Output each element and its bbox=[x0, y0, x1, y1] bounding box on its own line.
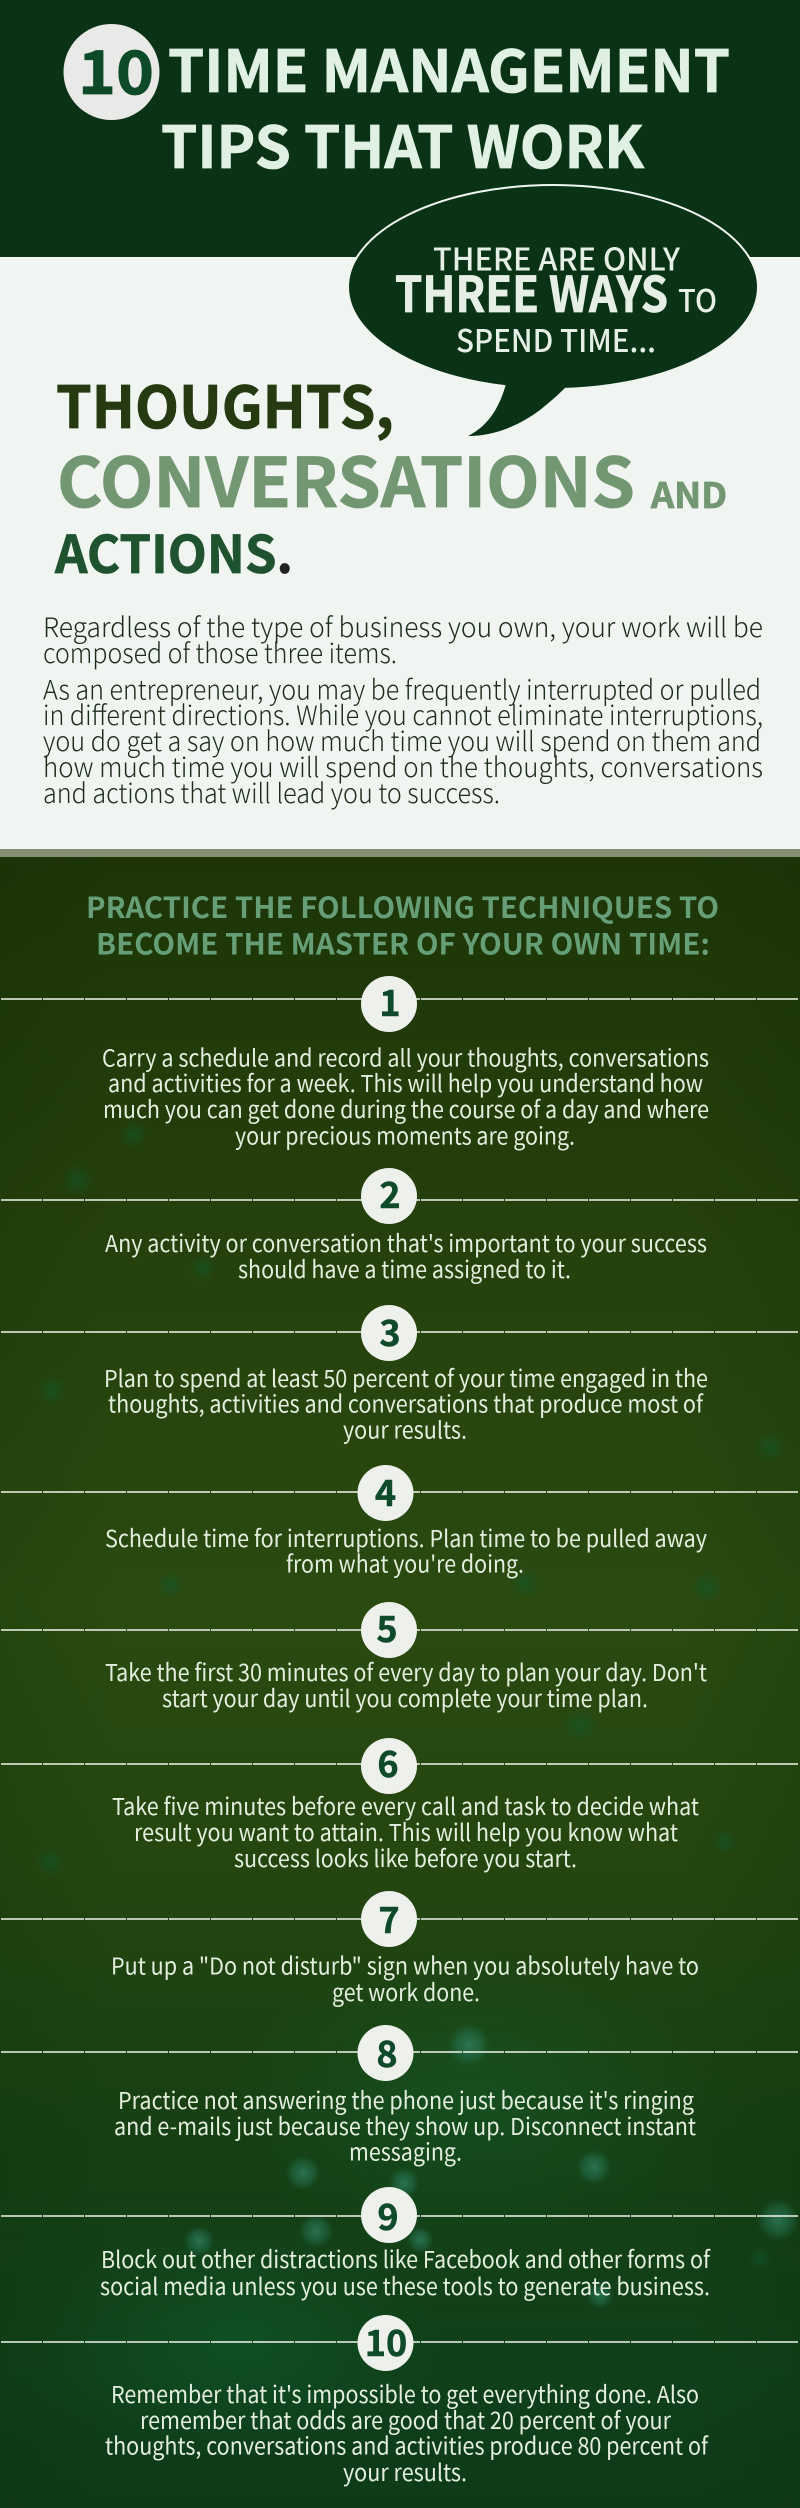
tip 8: messaging. bbox=[349, 2134, 462, 2168]
tip 6: success looks like before you start. bbox=[234, 1840, 577, 1874]
heading: practice the following techniques: BECOME THE MASTER OF YOUR OWN TIME: bbox=[96, 922, 710, 964]
tip 2: 2 bbox=[379, 1167, 401, 1219]
tip 3: Plan to spend at least 50 percent of your time engaged in the bbox=[104, 1360, 708, 1394]
text block: introduction bbox=[43, 606, 763, 811]
heading: thoughts, conversations and actions: AND bbox=[650, 468, 727, 519]
tip 6: 6 bbox=[377, 1736, 399, 1788]
panel: title header bbox=[0, 0, 800, 257]
tip 4: from what you're doing. bbox=[286, 1546, 524, 1580]
tip 10: Remember that it's impossible to get everything done. Also bbox=[111, 2376, 699, 2410]
tip 10: your results. bbox=[343, 2454, 467, 2488]
icon: number 10 badge bbox=[64, 24, 160, 120]
icon: number 10 badge: 10 bbox=[78, 25, 154, 112]
tip 7: Put up a "Do not disturb" sign when you absolutely have to bbox=[111, 1948, 699, 1982]
text block: introduction: you do get a say on how much time you will spend on them and bbox=[43, 720, 761, 759]
tip 10: thoughts, conversations and activities produce 80 percent of bbox=[105, 2428, 709, 2462]
panel: intro background bbox=[0, 0, 800, 850]
tip 5: Take the first 30 minutes of every day to plan your day. Don't bbox=[105, 1654, 707, 1688]
text block: introduction: Regardless of the type of business you own, your work will be bbox=[43, 606, 763, 645]
tip 10 bbox=[1, 2315, 799, 2488]
tip 9: social media unless you use these tools to generate business. bbox=[100, 2268, 710, 2302]
tip 3: thoughts, activities and conversations that produce most of bbox=[108, 1386, 704, 1420]
text block: introduction: composed of those three items. bbox=[43, 632, 397, 671]
tip 7: 7 bbox=[378, 1892, 400, 1944]
tip 1: Carry a schedule and record all your thoughts, conversations bbox=[102, 1040, 709, 1074]
title: TIME MANAGEMENT bbox=[168, 25, 730, 109]
text block: introduction: As an entrepreneur, you may be frequently interrupted or pulled bbox=[43, 668, 761, 708]
tip 9: Block out other distractions like Facebook and other forms of bbox=[101, 2241, 711, 2275]
tip 6: result you want to attain. This will help you know what bbox=[134, 1814, 678, 1848]
tip 8: Practice not answering the phone just because it's ringing bbox=[118, 2082, 694, 2116]
tip 7 bbox=[1, 1891, 799, 2008]
tip 5 bbox=[1, 1601, 799, 1714]
tip 8 bbox=[1, 2025, 799, 2168]
tip 9: 9 bbox=[377, 2189, 399, 2241]
tip 10: 10 bbox=[365, 2315, 407, 2367]
tip 8: 8 bbox=[376, 2026, 398, 2078]
tip 1: and activities for a week. This will help you understand how bbox=[108, 1065, 703, 1099]
callout: speech bubble: SPEND TIME... bbox=[456, 316, 656, 361]
tip 3: 3 bbox=[379, 1305, 401, 1357]
tip 4 bbox=[1, 1465, 799, 1580]
callout: speech bubble bbox=[348, 185, 758, 436]
callout: speech bubble: THERE ARE ONLY bbox=[433, 234, 681, 280]
heading: thoughts, conversations and actions bbox=[54, 361, 727, 588]
title: TIPS THAT WORK bbox=[161, 101, 645, 185]
tip 8: and e-mails just because they show up. Disconnect instant bbox=[114, 2108, 696, 2142]
tip 10: remember that odds are good that 20 percent of your bbox=[140, 2402, 672, 2436]
heading: thoughts, conversations and actions: THOUGHTS, bbox=[56, 361, 394, 445]
divider band bbox=[0, 849, 800, 857]
tip 6: Take five minutes before every call and task to decide what bbox=[112, 1788, 699, 1822]
callout: speech bubble: TO bbox=[678, 276, 717, 321]
tip 1: much you can get done during the course of a day and where bbox=[103, 1091, 709, 1125]
tip 7: get work done. bbox=[332, 1974, 480, 2008]
callout: speech bubble: THREE WAYS bbox=[395, 256, 668, 327]
heading: thoughts, conversations and actions: CONVERSATIONS bbox=[57, 428, 635, 527]
tip 5: start your day until you complete your time plan. bbox=[162, 1680, 648, 1714]
tip 4: Schedule time for interruptions. Plan time to be pulled away bbox=[105, 1520, 707, 1554]
tip 2 bbox=[1, 1167, 799, 1285]
panel: techniques background bbox=[0, 857, 800, 2508]
tip 1 bbox=[1, 975, 799, 1152]
text block: introduction: how much time you will spend on the thoughts, conversations bbox=[43, 746, 763, 785]
text block: introduction: in different directions. While you cannot eliminate interruptions, bbox=[43, 694, 763, 733]
tip 2: Any activity or conversation that's important to your success bbox=[105, 1225, 707, 1259]
tip 1: 1 bbox=[379, 975, 401, 1027]
tip 6 bbox=[1, 1736, 799, 1874]
heading: thoughts, conversations and actions: ACTIONS. bbox=[54, 513, 293, 588]
tip 2: should have a time assigned to it. bbox=[238, 1251, 571, 1285]
tip 5: 5 bbox=[376, 1601, 398, 1653]
tip 4: 4 bbox=[375, 1465, 396, 1517]
tip 9 bbox=[1, 2187, 799, 2302]
heading: practice the following techniques bbox=[86, 885, 719, 964]
text block: introduction: and actions that will lead you to success. bbox=[43, 772, 500, 811]
tip 1: your precious moments are going. bbox=[235, 1118, 575, 1152]
tip 3 bbox=[1, 1305, 799, 1446]
heading: practice the following techniques: PRACTICE THE FOLLOWING TECHNIQUES TO bbox=[86, 885, 719, 927]
title bbox=[161, 25, 730, 185]
tip 3: your results. bbox=[343, 1412, 467, 1446]
